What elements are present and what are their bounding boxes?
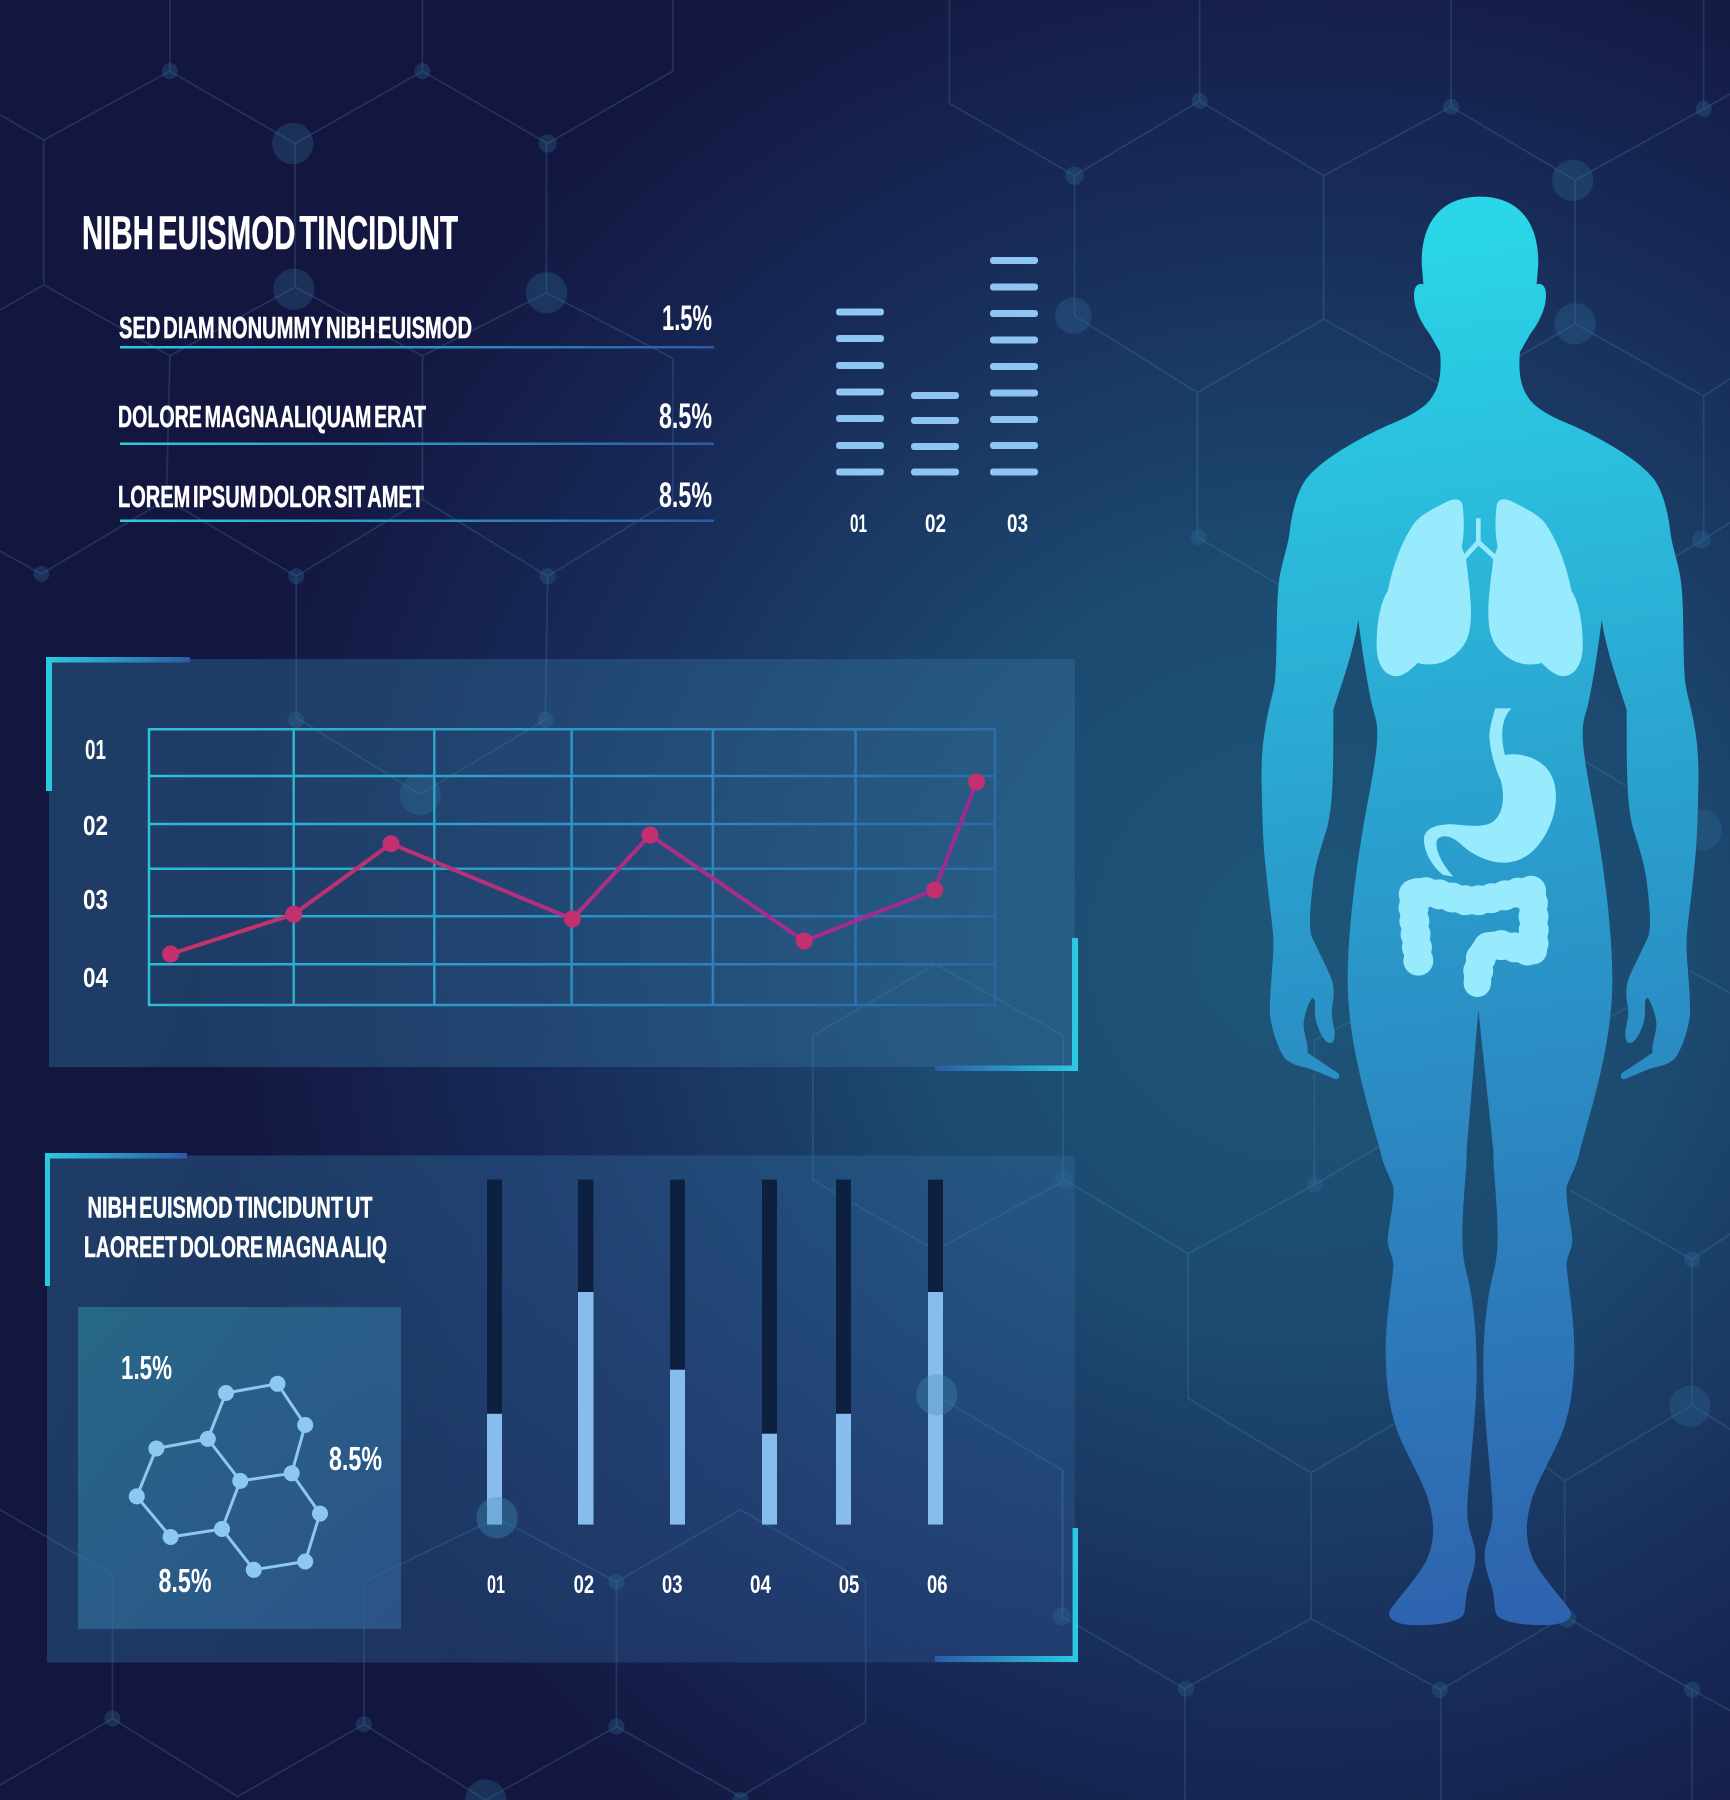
corner bracket bottom right: [935, 938, 1078, 1071]
bar fills: [487, 1292, 943, 1525]
molecule percentages: 1.5%: [121, 1349, 172, 1386]
icon: stomach: [1424, 708, 1556, 877]
panel heading: NIBH EUISMOD TINCIDUNT UT: [88, 1192, 372, 1224]
dash chart labels: 02: [925, 510, 946, 538]
dash chart labels: [850, 510, 1028, 538]
corner bracket top left: [45, 1153, 187, 1286]
bar labels: 04: [750, 1571, 771, 1599]
stat row 2: 8.5%: [659, 397, 712, 436]
icon: lungs: [1377, 499, 1583, 676]
panel heading: LAOREET DOLORE MAGNA ALIQ: [84, 1231, 387, 1264]
heading: NIBH EUISMOD TINCIDUNT: [82, 206, 458, 259]
stat row 3: 8.5%: [659, 476, 712, 515]
data line: [171, 782, 977, 954]
molecule percentages: 8.5%: [158, 1562, 212, 1599]
stat row 3: LOREM IPSUM DOLOR SIT AMET: [118, 479, 424, 514]
bar tracks: [487, 1180, 943, 1525]
bar labels: 01: [487, 1571, 505, 1599]
y axis labels: 02: [83, 810, 108, 841]
corner bracket bottom right: [935, 1528, 1078, 1662]
panel background: [49, 659, 1075, 1067]
bar labels: 06: [927, 1571, 948, 1599]
dash chart labels: 01: [850, 510, 867, 538]
stat row 1: SED DIAM NONUMMY NIBH EUISMOD: [119, 310, 472, 345]
body silhouette: [1261, 197, 1698, 1625]
stat row 3: [118, 476, 714, 522]
stat row 1: [119, 299, 714, 348]
y axis labels: 03: [83, 884, 108, 915]
dash bars: [836, 257, 1038, 476]
panel background: [47, 1156, 1075, 1662]
molecule diagram: [129, 1376, 328, 1578]
dash chart labels: 03: [1007, 510, 1028, 538]
icon: intestine: [1413, 891, 1534, 983]
dash column chart: [836, 257, 1038, 538]
y axis labels: [83, 734, 108, 993]
panel: stat list: [118, 299, 714, 522]
stat row 2: [118, 397, 714, 445]
corner bracket top left: [46, 657, 190, 791]
bar labels: 03: [662, 1571, 682, 1599]
grid: [149, 729, 995, 1005]
molecule percentages: [121, 1349, 382, 1599]
translucent nodes over bars: [476, 1374, 958, 1538]
molecule percentages: 8.5%: [329, 1440, 382, 1477]
bar labels: 05: [839, 1571, 859, 1599]
panel heading: [84, 1192, 387, 1264]
panel: line chart: [46, 657, 1078, 1071]
stat row 1: 1.5%: [662, 299, 712, 338]
bar labels: [487, 1571, 948, 1599]
y axis labels: 01: [85, 734, 106, 765]
bar labels: 02: [574, 1571, 594, 1599]
molecule card: [78, 1307, 401, 1629]
data points: [162, 774, 985, 962]
human body figure: [1261, 197, 1698, 1625]
stat row 2: DOLORE MAGNA ALIQUAM ERAT: [118, 399, 426, 434]
y axis labels: 04: [83, 962, 108, 993]
panel: molecule and bars: [45, 1153, 1078, 1662]
